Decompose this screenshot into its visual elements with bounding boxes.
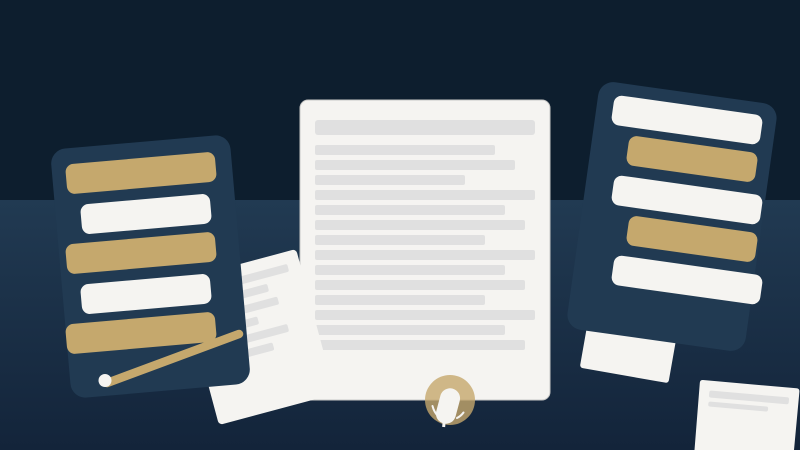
- left panel row 2: [80, 193, 212, 235]
- right panel row 3: [611, 175, 763, 225]
- left panel row 3: [65, 232, 217, 274]
- document text lines: [315, 145, 535, 350]
- microphone capsule: [434, 386, 462, 426]
- left panel row 5: [65, 312, 217, 354]
- right panel row 2: [626, 135, 758, 183]
- left panel row 4: [80, 273, 212, 315]
- right panel row 1: [611, 95, 763, 145]
- right panel row 4: [626, 215, 758, 263]
- microphone stem: [442, 420, 446, 427]
- right panel row 5: [611, 255, 763, 305]
- icon: microphone badge: [425, 375, 475, 427]
- document heading bar: [315, 120, 535, 135]
- small paper under right panel: [580, 289, 682, 383]
- microphone arc: [432, 406, 464, 418]
- background: desk surface gradient: [0, 200, 800, 450]
- left panel row 1: [65, 152, 217, 194]
- left panel: [50, 134, 251, 399]
- tilted paper behind left panel: [180, 249, 335, 425]
- pen: [98, 334, 239, 387]
- background: dark wall: [0, 0, 800, 200]
- right panel: [565, 80, 779, 353]
- pen tip: [98, 374, 112, 387]
- bottom-right paper: [694, 380, 799, 450]
- main document: [300, 100, 550, 400]
